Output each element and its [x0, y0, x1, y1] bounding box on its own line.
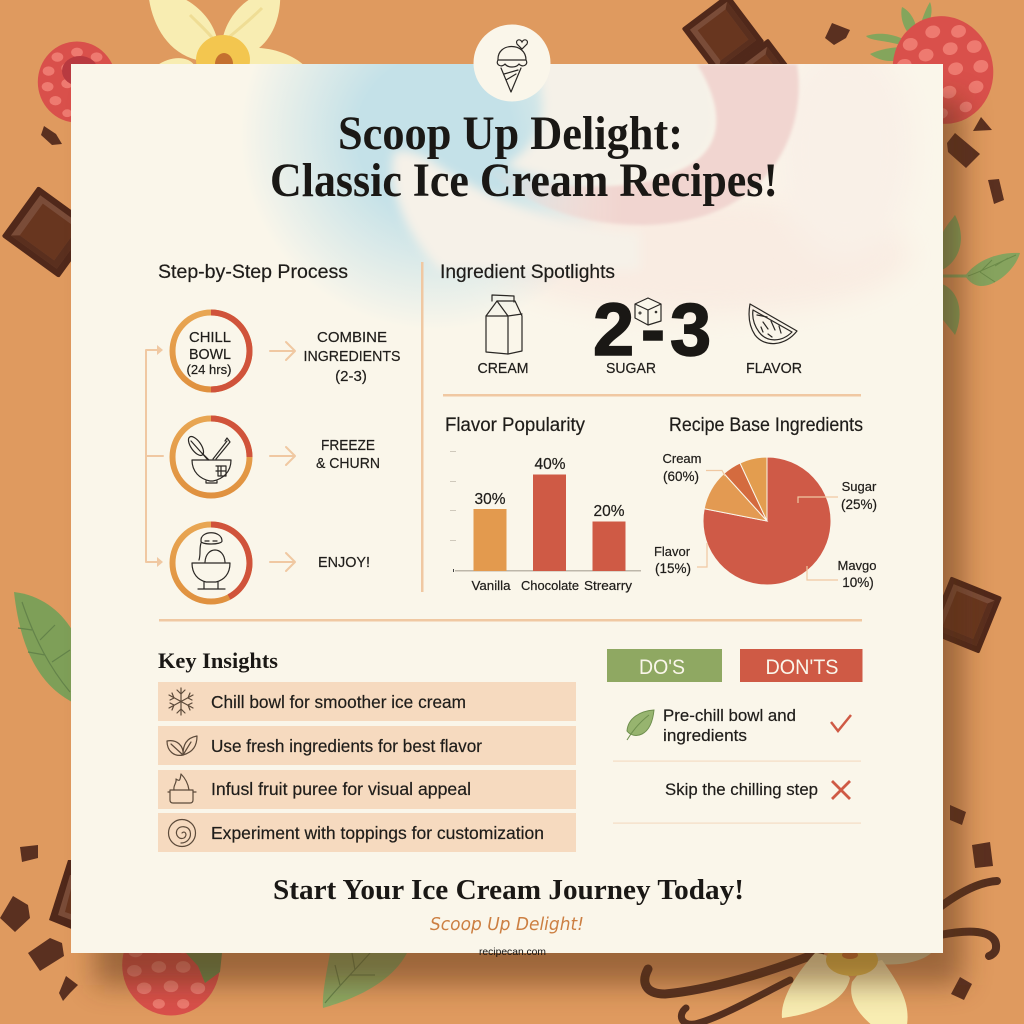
pie labels: Mavgo	[837, 558, 877, 573]
step 2 result text: FREEZE	[321, 437, 375, 454]
heading: key insights: Key Insights	[158, 648, 278, 673]
do item text: Pre-chill bowl and	[663, 706, 796, 725]
main panel	[71, 0, 943, 953]
badge: ice cream icon	[474, 24, 550, 102]
title	[270, 107, 778, 207]
icon: sugar cube	[635, 298, 661, 325]
footer tagline: Scoop Up Delight!	[430, 914, 584, 935]
decoration: vanilla pods	[645, 881, 997, 1024]
insight 3: Infusl fruit puree for visual appeal	[211, 779, 471, 799]
bar: chocolate: 40%	[534, 456, 566, 473]
step 1: chill bowl: CHILL	[189, 329, 231, 346]
pie labels: (25%)	[841, 497, 877, 512]
list divider	[613, 760, 861, 762]
icon: cross mark	[832, 781, 850, 799]
decoration: chocolate bottom left	[49, 860, 74, 930]
decoration: raspberry top left	[38, 41, 116, 123]
heading: step-by-step process: Step-by-Step Process	[158, 262, 348, 283]
label: sugar: SUGAR	[606, 360, 656, 377]
insight 1: Chill bowl for smoother ice cream	[211, 692, 466, 712]
pie labels: 10%)	[842, 575, 874, 590]
arrow: step 3	[270, 553, 295, 571]
icon: snowflake	[169, 688, 193, 715]
bar chart: flavor popularity	[445, 415, 641, 593]
process connector	[146, 345, 163, 567]
pie labels	[654, 451, 877, 590]
decoration: vanilla flower top left	[148, 0, 305, 85]
decoration: chocolate top right	[682, 0, 804, 122]
decoration: chocolate right	[928, 576, 1002, 654]
decoration: vanilla flower bottom right	[782, 944, 934, 1024]
step 1: chill bowl: (24 hrs)	[186, 362, 232, 377]
header: do's	[607, 649, 722, 682]
step 2 result text: & CHURN	[316, 455, 380, 472]
pie slices	[703, 457, 831, 585]
label: cream: CREAM	[478, 360, 528, 377]
icon: cream carton	[486, 295, 522, 354]
step 2 result text	[316, 437, 380, 472]
decoration: mint leaf left	[14, 592, 72, 702]
step 1 result text: (2-3)	[335, 368, 367, 385]
step 1 result text	[304, 329, 400, 385]
bar: strawberry: 20%	[593, 503, 625, 520]
sugar amount: -	[641, 288, 665, 371]
bar: chocolate: Chocolate	[521, 579, 579, 593]
pie leader lines	[697, 470, 838, 580]
icon: green leaf	[627, 710, 654, 740]
insight 3	[158, 770, 576, 809]
pie chart: recipe base ingredients: Recipe Base Ingredients	[669, 415, 863, 436]
arrow: step 2	[270, 447, 295, 465]
step 1 result text: INGREDIENTS	[304, 348, 400, 365]
insight 1	[158, 682, 576, 721]
pie labels: Sugar	[842, 479, 877, 494]
decoration: raspberry bottom	[122, 915, 222, 1015]
step 3: sundae bowl	[172, 524, 250, 602]
panel shadow	[95, 100, 963, 985]
source credit: recipecan.com	[479, 946, 546, 958]
pie labels: (60%)	[663, 469, 699, 484]
divider	[159, 619, 862, 622]
sugar amount	[593, 288, 711, 371]
decoration: chocolate left	[2, 186, 95, 278]
vertical divider	[421, 262, 424, 592]
bar: vanilla: Vanilla	[472, 579, 511, 593]
insight 2: Use fresh ingredients for best flavor	[211, 736, 482, 756]
don't item text: Skip the chilling step	[665, 780, 818, 799]
header: don'ts: DON'TS	[766, 656, 838, 679]
bar: strawberry	[584, 503, 633, 593]
sugar amount: 3	[670, 288, 711, 371]
do item text: ingredients	[663, 726, 747, 745]
title: Classic Ice Cream Recipes!	[270, 154, 778, 207]
label: flavor: FLAVOR	[746, 360, 802, 377]
icon: spiral	[168, 820, 196, 846]
step 2: whisk and bowl	[172, 418, 250, 496]
divider	[443, 394, 861, 396]
step 3 result text: ENJOY!	[318, 554, 370, 571]
insight 4	[158, 813, 576, 852]
heading: ingredient spotlights: Ingredient Spotlights	[440, 262, 615, 283]
bar chart: flavor popularity: Flavor Popularity	[445, 415, 585, 436]
arrow: step 1	[270, 342, 295, 360]
title: Scoop Up Delight:	[338, 107, 683, 160]
step 1: chill bowl: BOWL	[189, 346, 231, 363]
pie labels: (15%)	[655, 561, 691, 576]
header: do's: DO'S	[639, 656, 685, 679]
footer call to action: Start Your Ice Cream Journey Today!	[273, 875, 744, 906]
list divider	[613, 822, 861, 824]
sugar amount: 2	[593, 288, 634, 371]
bar: chocolate	[521, 456, 579, 593]
icon: check mark	[831, 715, 851, 731]
icon: leaves	[167, 736, 197, 755]
step 1: chill bowl	[172, 312, 250, 390]
pie labels: Cream	[662, 451, 702, 466]
decoration: strawberry top right	[866, 2, 1005, 135]
step 1 result text: COMBINE	[317, 329, 387, 346]
bar: strawberry: Strearry	[584, 579, 633, 593]
icon: citrus slice	[749, 304, 797, 344]
bar: vanilla: 30%	[474, 491, 506, 508]
decoration: mint leaves right	[942, 215, 1020, 335]
decoration: mint leaf bottom	[323, 953, 407, 1008]
do item text	[663, 706, 796, 745]
insight 2	[158, 726, 576, 765]
pie chart: recipe base ingredients	[654, 415, 877, 590]
pie labels: Flavor	[654, 544, 691, 559]
insight 4: Experiment with toppings for customization	[211, 823, 544, 843]
icon: pot with flame	[168, 774, 196, 803]
header: don'ts	[740, 649, 862, 682]
bar: vanilla	[472, 491, 511, 593]
